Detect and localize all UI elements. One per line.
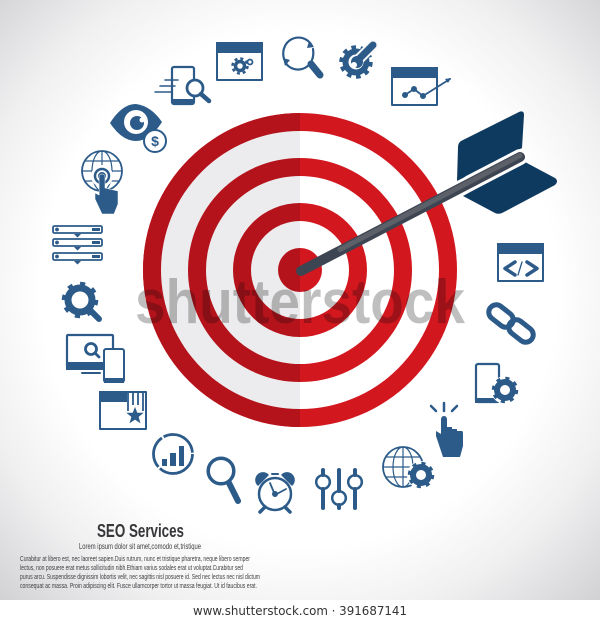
body text: consequat ac massa. Proin adipiscing elit. Fusce ullamcorper tortor ut massa feugiat. Ut id faucibus erat.: [20, 583, 257, 590]
icon: sliders: [316, 470, 362, 508]
watermark: shutterstock: [135, 268, 465, 337]
subheading: Lorem ipsum dolor sit amet,comodo et,tristique: [79, 542, 201, 551]
icon: chain links: [486, 302, 536, 345]
icon: bar chart in circle: [154, 434, 192, 474]
icon: globe with pointing hand: [82, 151, 122, 214]
heading: SEO Services: [97, 521, 184, 541]
icon: magnifier: [208, 458, 238, 501]
body text: [20, 556, 260, 590]
icon: wrench and gear: [342, 45, 373, 76]
target: [143, 113, 457, 427]
icon: servers: [53, 226, 102, 264]
icon: clicking hand: [431, 403, 463, 457]
icon: phone with gear: [475, 364, 519, 404]
icon: alarm clock: [256, 473, 294, 512]
icon: browser with gears: [216, 42, 263, 80]
icon: eye with dollar: [110, 104, 166, 152]
icon: search with refresh arrows: [283, 38, 320, 75]
dart: [301, 111, 557, 271]
body text: lectus, non posuere erat metus sollicitudin nibh.Ethiam varius sodales erat ut voluptat.Curabitur sed: [20, 565, 243, 572]
icon: browser with code: [497, 243, 544, 281]
icon: eye with dollar: $: [151, 133, 159, 149]
icon: browser with star: [99, 391, 146, 429]
body text: Curabitur at libero est, nec laoreet sapien.Duis rutrum, nunc et tristique pharetra, neque libero semper: [20, 556, 250, 563]
icon: monitor and phone: [66, 335, 124, 383]
icon: gear search: [64, 284, 99, 319]
icon: browser with growth chart: [391, 67, 451, 105]
icon: globe with gear: [383, 447, 435, 489]
body text: purus arcu. Suspendisse dignissim lobortis velit, nec sagittis nisl posuere id. Sed nec lectus nec nisl dictum: [20, 574, 260, 581]
icon: phone search: [155, 67, 209, 104]
footer credit: www.shutterstock.com · 391687141: [193, 603, 407, 618]
